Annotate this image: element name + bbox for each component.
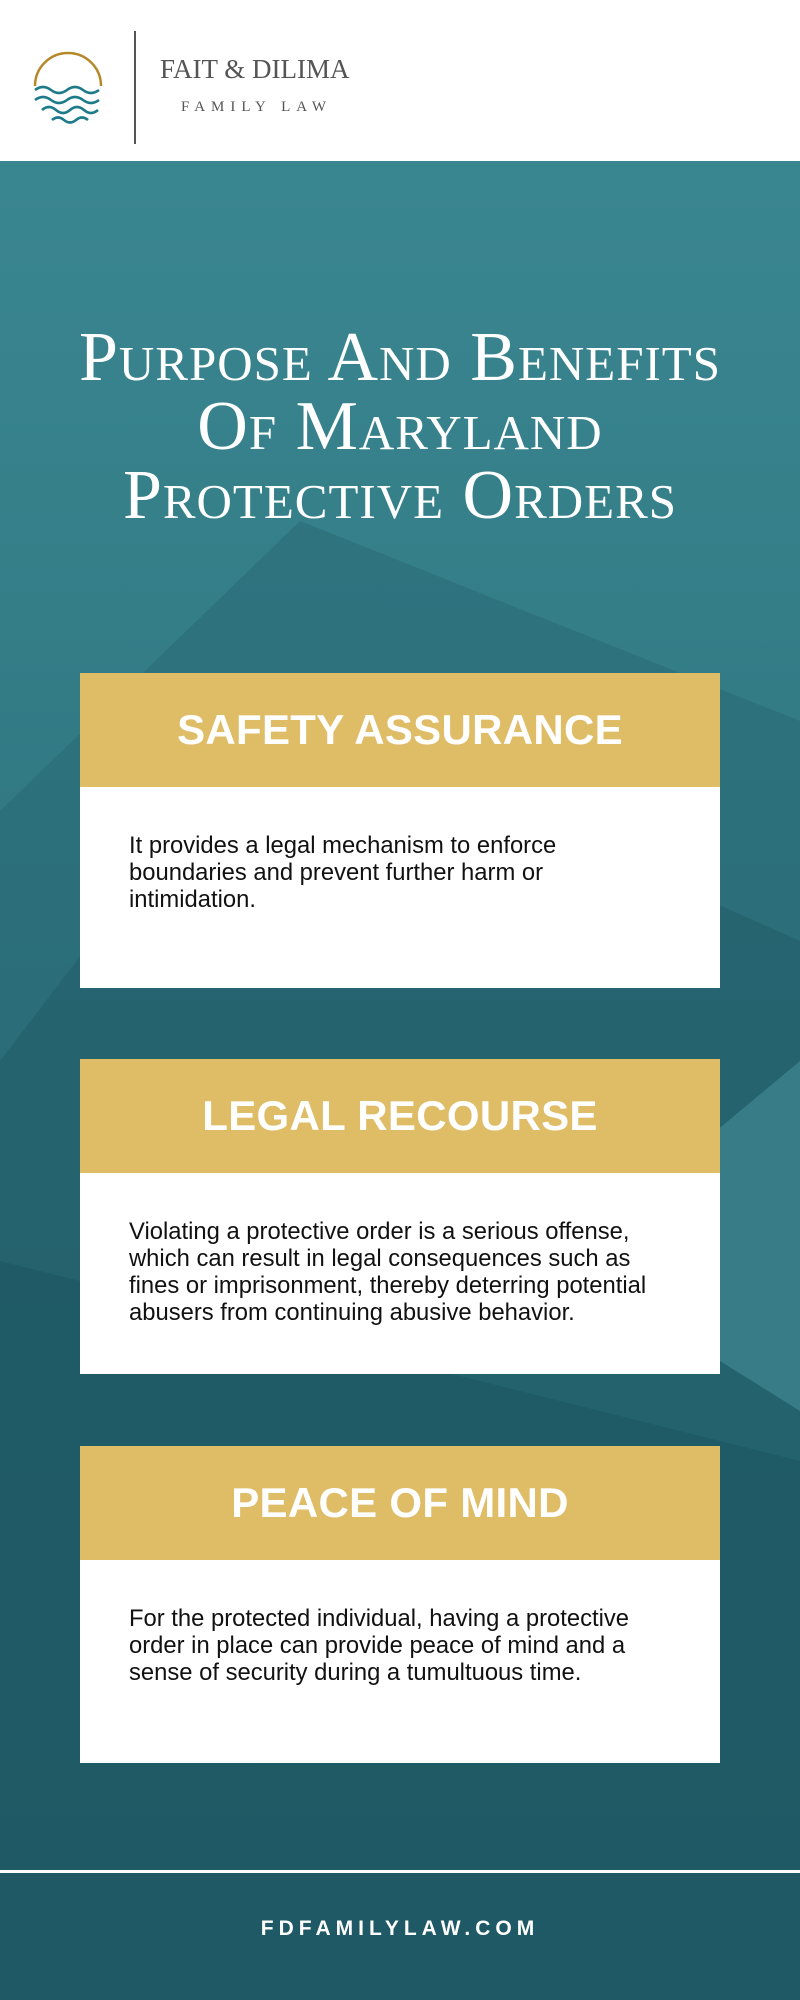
title: Of Maryland	[197, 388, 603, 465]
panel: peace of mind	[80, 1446, 720, 1763]
panel: safety assurance: SAFETY ASSURANCE	[177, 706, 623, 753]
title: Purpose And Benefits	[79, 319, 721, 396]
panel: legal recourse: Violating a protective order is a serious offense, which can result in legal consequences such as fines or imprisonment, thereby deterring potential abusers from continuing abusive behavior.	[129, 1218, 646, 1326]
brand name: FAIT & DILIMA	[160, 54, 350, 84]
panel: legal recourse	[80, 1059, 720, 1374]
icon: logo	[34, 52, 102, 124]
panel: legal recourse: LEGAL RECOURSE	[202, 1092, 598, 1139]
panel: safety assurance	[80, 673, 720, 988]
footer url: FDFAMILYLAW.COM	[261, 1917, 539, 1940]
panel: peace of mind: PEACE OF MIND	[231, 1479, 569, 1526]
title: Protective Orders	[123, 457, 677, 534]
panel: peace of mind: For the protected individual, having a protective order in place can provide peace of mind and a sense of security during a tumultuous time.	[129, 1605, 629, 1686]
title	[79, 319, 721, 534]
header: FAMILY LAW	[181, 99, 332, 115]
panel: safety assurance: It provides a legal mechanism to enforce boundaries and prevent further harm or intimidation.	[129, 832, 556, 913]
header	[0, 0, 800, 161]
